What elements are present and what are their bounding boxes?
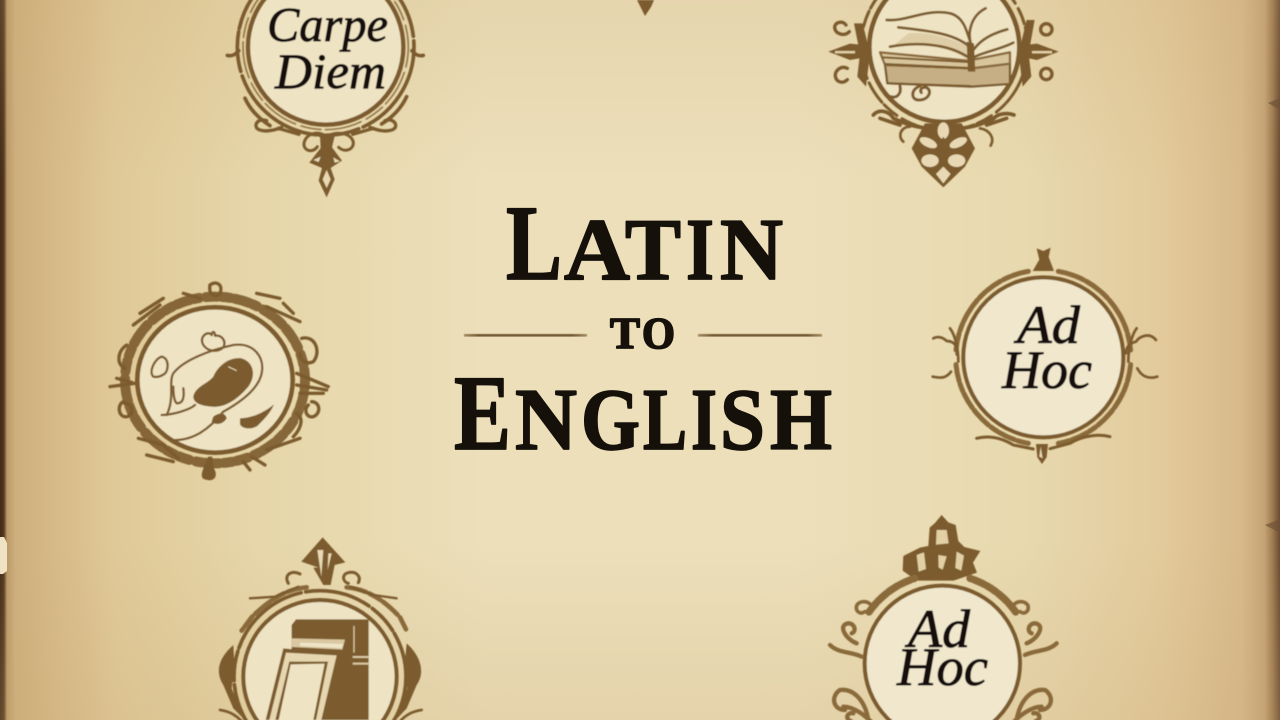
- heading: English: E: [454, 355, 511, 473]
- label: Ad Hoc: Ad: [905, 599, 971, 659]
- heading: English: I: [691, 372, 717, 469]
- subheading: to: T: [610, 309, 640, 358]
- subheading: to: O: [642, 309, 675, 358]
- frame ornament: [219, 537, 422, 720]
- heading: English: S: [720, 372, 765, 469]
- frame ornament: [933, 248, 1157, 464]
- heading: English: H: [770, 372, 832, 469]
- heading: English: G: [581, 372, 640, 469]
- heading: Latin: N: [720, 202, 783, 299]
- icon: creature drawing: [152, 332, 274, 440]
- medallion: open book: [828, 0, 1059, 187]
- heading: Latin: A: [564, 202, 630, 299]
- heading: Latin: L: [506, 185, 562, 303]
- medallion: Carpe Diem: Diem: [274, 43, 386, 99]
- label: Ad Hoc: Ad: [1014, 295, 1081, 355]
- frame ornament: [110, 283, 328, 480]
- heading: Latin: I: [686, 202, 714, 299]
- medallion: Carpe Diem: [227, 0, 423, 197]
- heading: English: N: [515, 372, 577, 469]
- top centre ornament: [637, 0, 654, 16]
- frame ornament: [828, 0, 1059, 187]
- heading: Latin: T: [625, 202, 681, 299]
- heading: English: L: [643, 372, 687, 469]
- icon: open book: [880, 8, 1013, 100]
- medallion: Ad Hoc bottom: [830, 515, 1057, 720]
- medallion: creature: [110, 283, 328, 480]
- medallion: Ad Hoc right: [933, 248, 1157, 464]
- divider: left rule: [464, 334, 587, 337]
- right side ornament: [1019, 20, 1059, 87]
- frame ornament: [830, 515, 1057, 720]
- medallion: Ad Hoc right: Hoc: [1001, 340, 1092, 400]
- frame ornament: [227, 0, 423, 197]
- icon: books: [266, 619, 369, 720]
- divider: right rule: [698, 334, 822, 337]
- medallion: stacked books: [219, 537, 422, 720]
- left side ornament: [828, 22, 870, 87]
- medallion: Ad Hoc bottom: Hoc: [896, 637, 988, 697]
- title: [454, 185, 832, 473]
- bottom flower ornament: [873, 111, 1014, 187]
